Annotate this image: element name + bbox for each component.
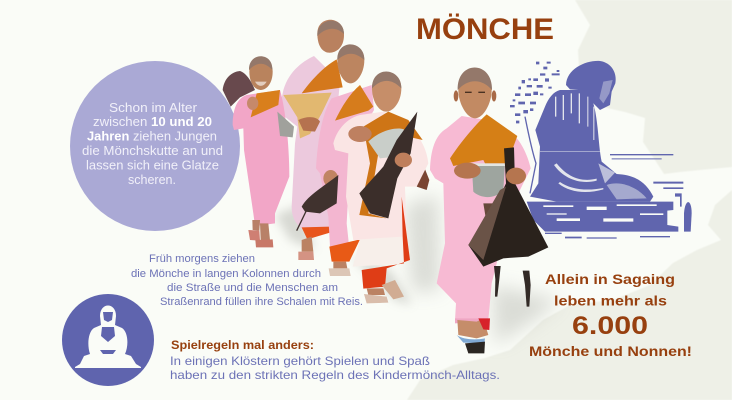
background map (407, 0, 732, 400)
monk 2 back (278, 20, 344, 260)
age text: die Mönchskutte an und (82, 144, 223, 158)
age text: Jahren ziehen Jungen (87, 130, 217, 144)
robe highlights (540, 80, 647, 199)
callout: Sagaing statistic: Allein in Sagaing (545, 271, 675, 287)
monk 4 (333, 71, 429, 303)
rules body: In einigen Klöstern gehört Spielen und Spaß (170, 354, 430, 368)
rules body: haben zu den strikten Regeln des Kindermönch-Alltags. (170, 368, 500, 382)
monk shadows (405, 195, 560, 345)
morning text: Straßenrand füllen ihre Schalen mit Reis. (160, 296, 363, 308)
tree (510, 62, 560, 193)
rules body (170, 354, 500, 382)
monk 1 left (223, 56, 294, 247)
age text (82, 101, 223, 187)
age text: scheren. (128, 173, 176, 187)
panel: age circle (70, 61, 240, 231)
title: MÖNCHE (416, 13, 554, 46)
rules heading: Spielregeln mal anders: (171, 340, 314, 352)
monk 3 (297, 44, 374, 276)
rules text (170, 340, 500, 382)
morning text (131, 253, 363, 308)
callout: Sagaing statistic (529, 271, 692, 359)
icon: seated Buddha (62, 294, 154, 386)
illustration: Buddha statue (510, 61, 692, 239)
age text: Schon im Alter (109, 101, 197, 115)
callout: Sagaing statistic: leben mehr als (554, 292, 667, 308)
morning text: die Straße und die Menschen am (167, 282, 338, 294)
morning text: Früh morgens ziehen (149, 253, 255, 265)
photo: monks walking in line (223, 20, 548, 353)
morning text: die Mönche in langen Kolonnen durch (131, 268, 321, 280)
statue plinth (527, 202, 678, 232)
callout: Sagaing statistic: Mönche und Nonnen! (529, 343, 692, 359)
monk 5 front (430, 67, 548, 353)
age text: zwischen 10 und 20 (93, 115, 212, 129)
age text: lassen sich eine Glatze (86, 158, 219, 172)
small figure (684, 202, 692, 232)
callout: Sagaing statistic: 6.000 (572, 312, 648, 340)
statue head (566, 61, 616, 110)
statue body (530, 90, 653, 202)
